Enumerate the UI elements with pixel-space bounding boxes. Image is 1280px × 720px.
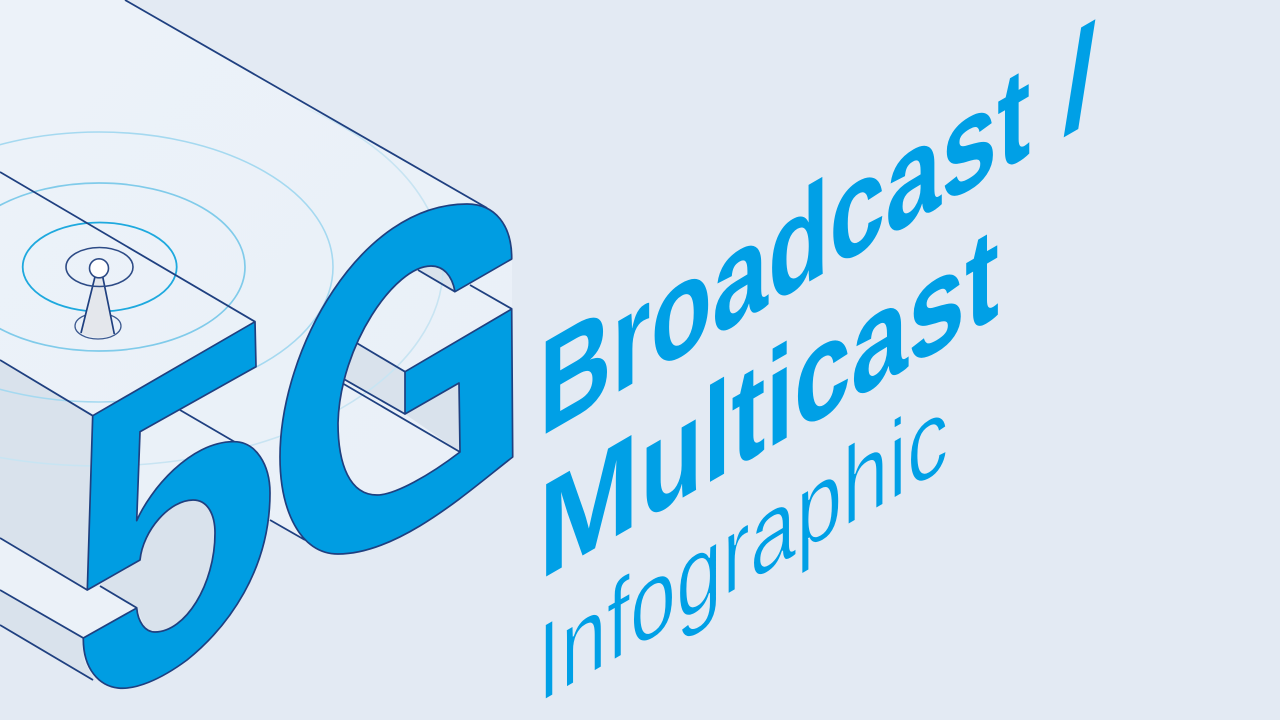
lower strip of 5 top side [0,538,137,638]
title line: Multicast: ulticast [640,195,999,551]
title line: Multicast [538,195,999,610]
antenna cone edges [81,277,114,334]
big numeral 5 [83,322,270,688]
antenna base ellipse [75,313,121,339]
infographic artwork [0,0,946,698]
title line: Broadcast /: Broadcast [539,34,1031,467]
title line: Broadcast /: / [1063,0,1097,164]
ring 3 [0,132,333,402]
lower strip of 5 shaded side [0,590,95,682]
icon: antenna tower [66,248,133,339]
ring 4 [0,68,443,466]
antenna ball [90,259,108,278]
extruded top surface of 5G [0,0,512,590]
antenna halo ellipse [66,248,133,286]
signal rings [0,68,443,466]
subtitle: Infographic: Infographic [538,368,948,720]
ring 1 [23,222,177,312]
ring 2 [0,183,245,351]
antenna cone [81,277,114,338]
shaded inner walls of G [342,266,460,452]
shaded inner hole of 5 [100,490,220,640]
structure edge lines [0,0,512,680]
big letter G [280,204,513,554]
shaded side of 5 block [0,360,93,590]
title line: Multicast: M [538,403,640,610]
